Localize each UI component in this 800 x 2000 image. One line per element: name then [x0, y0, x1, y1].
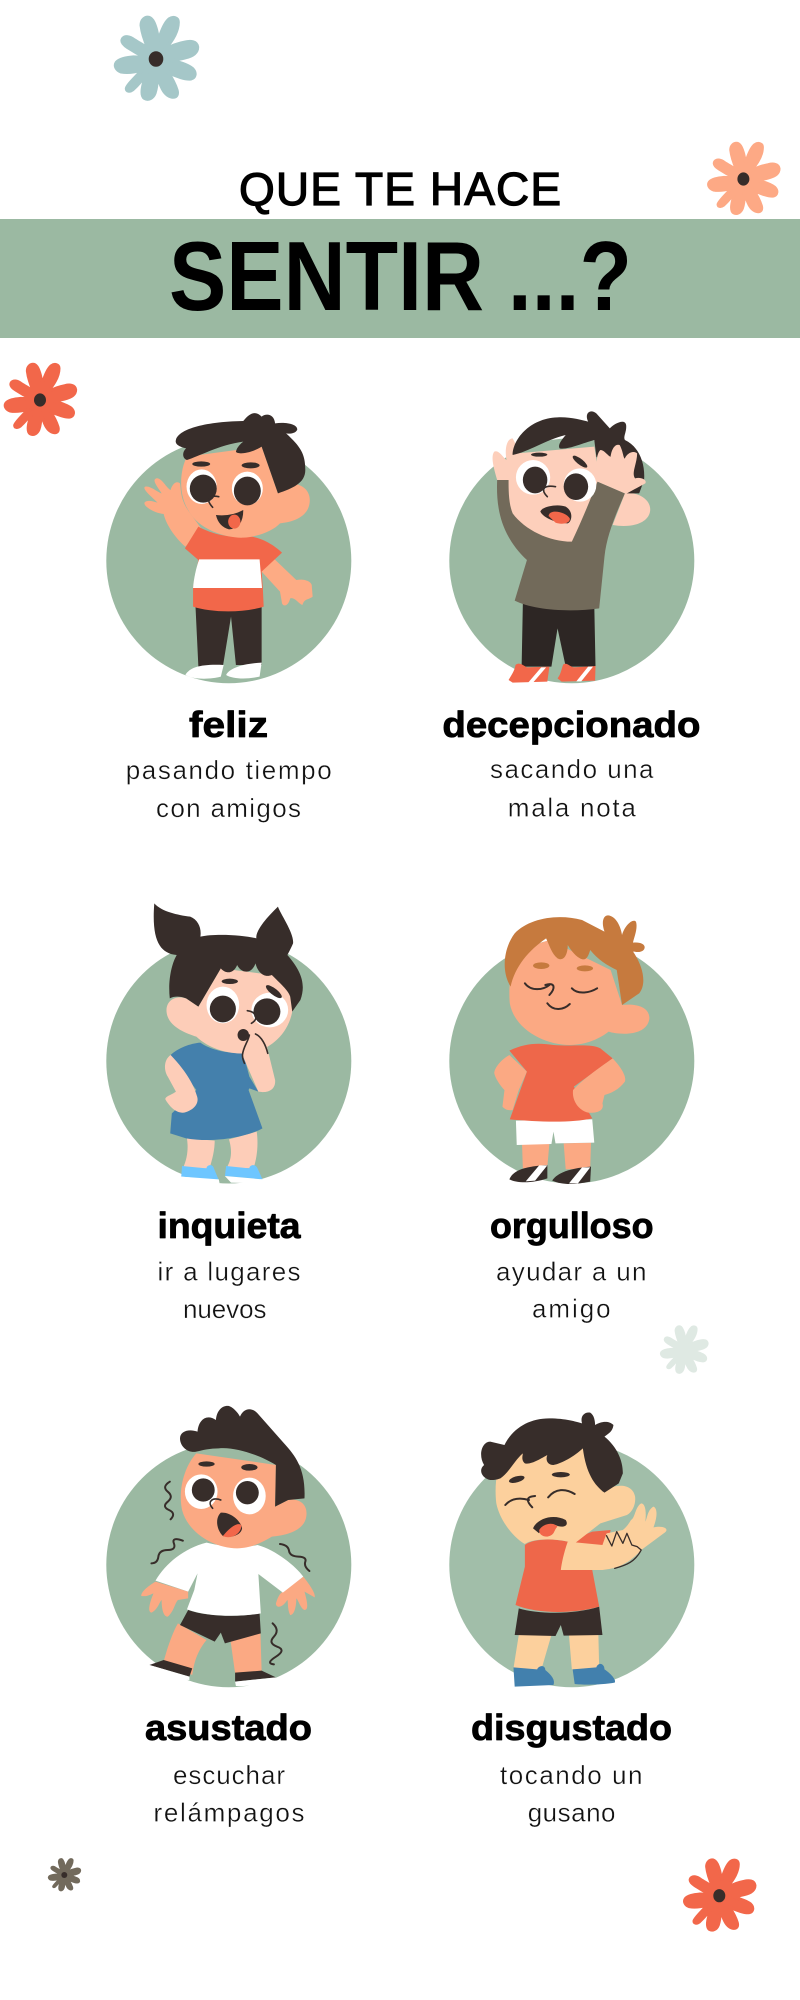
- character: worried girl: [154, 903, 303, 1183]
- title line: sentir: SENTIR ...?: [169, 221, 632, 331]
- description: feliz: [126, 755, 332, 823]
- description: orgulloso: amigo: [532, 1294, 611, 1324]
- flower: blue: [116, 17, 197, 99]
- flower: pale green: [661, 1326, 708, 1373]
- heading: feliz: feliz: [189, 704, 268, 745]
- description: disgustado: tocando un: [500, 1760, 642, 1790]
- heading: inquieta: inquieta: [158, 1205, 302, 1246]
- description: orgulloso: ayudar a un: [496, 1257, 646, 1287]
- character: scared boy: [141, 1406, 315, 1686]
- description: disgustado: gusano: [528, 1798, 616, 1828]
- description: decepcionado: mala nota: [508, 793, 636, 823]
- panel: decepcionado: [442, 411, 700, 823]
- flower: peach: [709, 143, 779, 213]
- flower: red top: [5, 364, 76, 434]
- description: asustado: relámpagos: [154, 1798, 304, 1828]
- panel: orgulloso: [449, 915, 694, 1324]
- character: disappointed boy: [493, 411, 650, 683]
- character: disgusted boy: [481, 1413, 666, 1687]
- panel: disgustado: [449, 1413, 694, 1828]
- circle: decepcionado: [449, 438, 694, 683]
- description: decepcionado: [490, 754, 654, 823]
- character: proud boy: [494, 915, 649, 1184]
- title line: que te hace: QUE TE HACE: [239, 163, 561, 215]
- flower: red bottom: [685, 1860, 755, 1930]
- circle: inquieta: [106, 938, 351, 1184]
- description: inquieta: nuevos: [183, 1294, 266, 1324]
- description: feliz: pasando tiempo: [126, 755, 332, 785]
- panel: inquieta: [106, 903, 351, 1324]
- panel: feliz: [106, 413, 351, 823]
- heading: disgustado: disgustado: [471, 1707, 672, 1748]
- circle: feliz: [106, 438, 351, 683]
- heading: orgulloso: orgulloso: [490, 1205, 654, 1246]
- description: inquieta: ir a lugares: [158, 1257, 300, 1287]
- description: orgulloso: [496, 1257, 646, 1324]
- description: decepcionado: sacando una: [490, 754, 654, 784]
- circle: orgulloso: [449, 938, 694, 1184]
- description: inquieta: [158, 1257, 300, 1324]
- flower: brown: [49, 1859, 80, 1891]
- title band: [0, 219, 800, 338]
- character: happy boy: [144, 413, 313, 679]
- circle: asustado: [106, 1442, 351, 1687]
- description: feliz: con amigos: [156, 793, 301, 823]
- description: asustado: escuchar: [173, 1760, 285, 1790]
- circle: disgustado: [449, 1442, 694, 1687]
- heading: asustado: asustado: [145, 1707, 312, 1748]
- panel: asustado: [106, 1406, 351, 1828]
- description: disgustado: [500, 1760, 642, 1828]
- description: asustado: [154, 1760, 304, 1828]
- heading: decepcionado: decepcionado: [442, 704, 700, 745]
